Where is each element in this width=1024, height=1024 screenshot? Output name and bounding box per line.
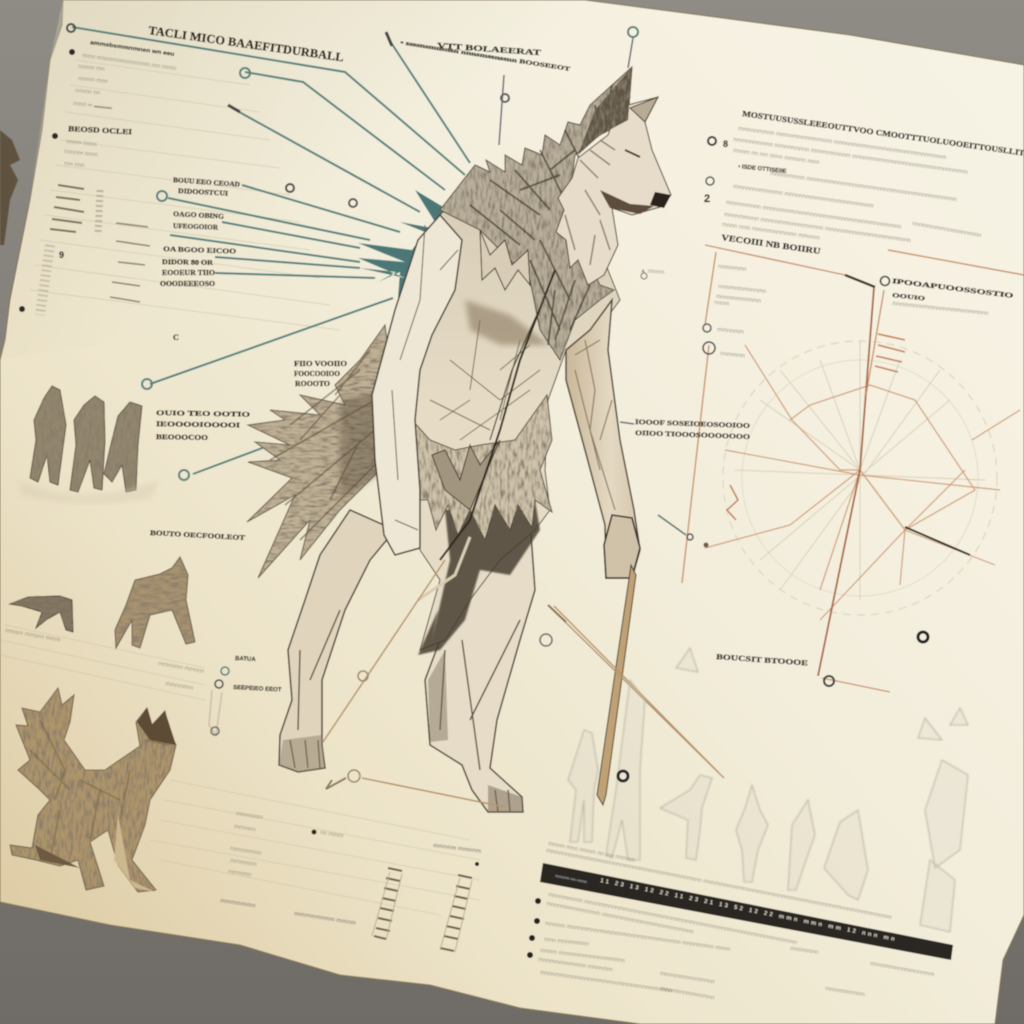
diagram sublabels: nnmmnmmnnnmn — [718, 284, 767, 295]
right top text block: mnnn mnn mmmnnnnmmnn mmnnm — [722, 222, 820, 242]
bottom-left table: mmmmmnmm mmnm — [294, 911, 356, 927]
figure 8 — [920, 860, 955, 932]
callout labels left: FIIO VOOIIO — [294, 360, 348, 368]
small cone 3 — [918, 718, 942, 740]
diagram sublabels: mnnnmmnnmmn — [716, 294, 761, 305]
right top text block: mnnnmmnnn mnnnnmmmnnnmnnnnmmmnnnmmnnmmnnnmmnn — [726, 200, 902, 231]
small wolf: standing — [115, 557, 195, 648]
wolf head — [556, 67, 671, 285]
figure 5 — [788, 800, 815, 890]
wolf lower dark fur — [418, 500, 540, 655]
orange frame lines and headers — [682, 245, 1024, 692]
diagram sublabels: OOUIO — [892, 293, 926, 302]
left data table text: nnnn▪ nnnn — [66, 139, 97, 148]
left data table text — [19, 40, 177, 315]
bottom-left table: mmnnm mmnnm — [433, 843, 481, 855]
left data table text: nnnnn mnn — [78, 76, 108, 85]
wolf chest shading — [465, 300, 550, 345]
small table lines and labels beside dogs: mmnmmm — [165, 681, 194, 692]
wolf abdomen lines — [430, 320, 540, 440]
bullet list under bar: mnnnmmnnnmmnnnmm — [870, 961, 935, 978]
bottom-left table: mmmmmmn — [220, 898, 256, 910]
callout labels left: UFEOGOIOR — [173, 222, 219, 232]
wolf long strap — [440, 270, 555, 560]
title: top centre: ▪ ssssnsmnsnsn nnnsmssnssnn BOOSEEOT — [400, 40, 571, 73]
right top text block: mnnnmmnnn mnnnnmmnnnmmnmnn mmnnnmnnnmmnnnmmnnmnnn — [724, 212, 911, 244]
teal markers — [67, 24, 638, 480]
left data table text: BEOSD OCLEI — [68, 124, 132, 136]
diagram sublabels: ▲ mnnm — [640, 268, 665, 276]
callout labels left: DIDOR 80 OR — [162, 258, 214, 267]
figure 2 — [606, 680, 645, 860]
small table lines and labels beside dogs: mmnnmn mmnnn — [158, 661, 205, 675]
wolf mane strokes — [470, 85, 612, 345]
teal leader lines — [72, 27, 470, 474]
pale sketch figures — [568, 648, 968, 932]
callout labels left: OOODEEEOSO — [160, 280, 216, 288]
left data table text: 9 — [59, 250, 64, 260]
left data table text: nn▪ nnn — [64, 161, 85, 169]
object at left edge — [0, 130, 20, 245]
left data table text: nnnnn nn — [75, 88, 100, 97]
bottom-left table: mmmmn — [228, 869, 252, 879]
right top text block: nnnmmnmmnnmmnnmmn — [912, 221, 982, 239]
teal shoulder wedges — [358, 190, 445, 298]
diagram sublabels: mnnmmnnnmmnnnnmmmnnmmnnn — [892, 301, 989, 317]
bottom-left table: mmmmnn — [230, 858, 257, 868]
wolf torso — [410, 170, 620, 650]
small table lines and labels beside dogs — [5, 628, 282, 735]
wolf hanging leaves — [480, 230, 530, 290]
ground wash under small wolves — [20, 480, 160, 503]
bullet list under bar: mnnnmmnnnmmnnnnmmnnnmmnnnmnnmmnnnn — [540, 970, 673, 995]
diagram sublabels: mmnnmm — [717, 327, 744, 336]
diagram sublabels — [540, 264, 1015, 686]
callout labels left: ROOOTO — [295, 380, 331, 388]
callout labels left: C — [173, 333, 179, 342]
small cone 1 — [676, 648, 698, 672]
callout labels left: IEOOOOIOOOOI — [156, 420, 240, 429]
title: top centre: VTT BOLAEERAT — [437, 41, 542, 57]
figure 1 — [568, 730, 598, 842]
marker on figures — [618, 771, 628, 781]
bullet list under bar — [527, 892, 935, 1002]
bullet list under bar: mnnmmnnnmmnn mnnnmm — [538, 957, 613, 973]
black data bar — [540, 863, 953, 960]
black data bar: 11 23 13 12 22 11 23 21 13 52 12 22 mmn mmn mm 12 nnn mn — [600, 878, 895, 943]
bullet list under bar: mnnnm mnnnmmnnnmmnnnmmnnmnnnmmnnmnn mnnnmmnn mnnn — [545, 921, 730, 953]
left data table text: nnnnn▪ nnnn — [64, 149, 98, 159]
staff — [597, 565, 636, 805]
small cone 2 — [950, 708, 968, 725]
right top text block: 2 — [704, 193, 710, 205]
bullet list under bar: mnnmmnn — [790, 946, 819, 956]
bottom-left table: mmmmmnn — [230, 846, 262, 857]
bullet list under bar: mnnnmnnmmnnmnn — [660, 986, 715, 1002]
wolf right arm — [566, 300, 640, 578]
ruled lines: left panel — [0, 60, 480, 915]
diagram sublabels: IPOOAPUOOSSOSTIO — [892, 277, 1015, 300]
callout labels left — [150, 176, 348, 542]
callout labels left: OA BGOO EICOO — [163, 245, 237, 256]
wolf skirt fur — [412, 395, 552, 540]
wolf front leg — [425, 520, 535, 812]
wolf hand — [604, 515, 640, 578]
small wolf: crouching — [10, 596, 73, 632]
wolf arm detail — [575, 340, 615, 510]
right top text block: mmnnnnnmnnnmn mnnnnnmmnnnmmmnnmmmnnm — [733, 184, 874, 210]
wolf leaf on hip — [432, 440, 500, 510]
brown leader lines — [323, 560, 724, 807]
diagram heading: VECOIII NB BOIIRU — [721, 232, 821, 256]
figure 7 — [925, 760, 968, 868]
small table lines and labels beside dogs: mmsm mmsnn mmm — [5, 628, 61, 644]
callout labels left: BEOOOCOO — [156, 433, 209, 442]
diagram sublabels: OIIOO TIOOOSOOOOOOO — [635, 429, 751, 441]
right top text block: mnnnnmmnn mnnnnmmnnmnnnnmmmnnnnmmmnnmmnnnmmnnmnn — [770, 171, 957, 203]
callout labels left: OAGO OBING — [173, 210, 225, 221]
bottom-left table — [220, 811, 481, 952]
bottom-left table: mmmnnm — [236, 811, 263, 821]
callout labels left: BOUTO OECFOOLEOT — [150, 529, 246, 542]
left data table text: mnnn mnsnnnnnnnnnnnnnnn mm nnnnn — [82, 53, 177, 72]
wolf neck fur — [440, 67, 632, 360]
title: top centre — [400, 40, 571, 73]
right top text block: MOSTUUSUSSLEEEOUTTVOO CMOOTTTUOLUOOEITTOUSLLIT — [742, 109, 1024, 158]
bullet list under bar: mnnnmmnnnmmnnn — [660, 971, 715, 986]
right top text block: mnnm nn mn nnnn mnnnnn mnn — [733, 148, 819, 166]
wolf rear leg — [279, 510, 395, 772]
bullet list under bar: mnnnmmnnn mnnnmmnnnmmnnmnnnnmmmnnnmnmnnnmnnmmnnmmnnnnmmnnmmnnmmn — [548, 892, 798, 946]
small table lines and labels beside dogs: BATUA — [235, 656, 256, 663]
callout labels left: EOOEUR TIIO — [162, 269, 216, 277]
figure 3 — [660, 775, 712, 860]
wolf tail fur — [247, 325, 395, 578]
diagram sublabels: nnmmnm — [720, 351, 745, 360]
caption rows above black bar: mmnn mnn nnmm nn mn nnmnm — [548, 841, 636, 864]
right top text block: nmmnnnmmnn mmnnmnnnn mnnmmnnnnm mnnnnnmmmnnmnnnnmmmnnnmnnnmmm — [733, 137, 968, 176]
large wolf-dog sketch — [10, 688, 176, 892]
diagram sublabels: IOOOF SOSEIOEOSOOIOO — [635, 418, 751, 430]
bullet list under bar: mnnnmmnnnm — [825, 986, 865, 998]
left data table text: nnnnn mn — [78, 64, 105, 73]
small table lines and labels beside dogs: SEEPEIEO EEOT — [233, 685, 282, 694]
callout labels left: FOOCOOIOO — [294, 370, 341, 378]
right top text block — [704, 109, 1024, 244]
diagram sublabels: nnnm — [714, 300, 729, 308]
left data table text: ammsbsmmnmnen wn eeu — [90, 40, 175, 58]
bullet list under bar: mnnm mnnnmmnnmnnnmmnnn — [540, 948, 625, 964]
bottom-left table: nn mmm — [320, 830, 344, 840]
radial diagram — [705, 340, 1020, 620]
right top text block: mmnnnmmnn mmnnmmnnnmmnnn mnnnnmmmmnnnmnnmnnnnmmnnmmnm — [738, 126, 947, 161]
right top text block: 8 — [723, 139, 728, 149]
bullet list under bar: mnn mnnmmnnn — [544, 937, 589, 948]
diagram sublabels: nnmnmmn — [718, 264, 747, 273]
small wolf group: three standing figures — [30, 386, 142, 492]
wolf leg detail — [290, 610, 520, 812]
left data table text: nnnn ▪▪ ▬▬▬ — [73, 101, 112, 111]
caption rows above black bar: mmnnnnmmnnmmnnnmnnnmmnnnmmnmnnmnnmnnmnnn mnnmmnnnnmnnnmmnnmmnnmmnnnmmnnmnnnmnnnmnnnmmnnmm — [546, 848, 892, 921]
right top text block: ▪ ISDE OTTISEIIE — [738, 164, 787, 175]
figure 4 — [736, 785, 768, 882]
callout labels left: OUIO TEO OOTIO — [156, 409, 251, 419]
figure 6 — [824, 810, 868, 900]
title: top left: TACLI MICO BAAEFITDURBALL — [148, 23, 345, 64]
bottom-left table: mmmnn — [234, 824, 256, 833]
bullet list under bar: mnnnmmnnnmnnnm mnnnmmnnnmnnnnmmnnnmmnnn — [546, 901, 694, 936]
diagram sublabels: BOUCSIT BTOOOE — [716, 652, 808, 667]
wolf left arm — [372, 215, 462, 555]
black data bar: mnnmm mn nmnn — [555, 873, 587, 884]
wolf figure — [279, 67, 671, 812]
callout labels left: DIDOOSTCUI — [178, 187, 229, 198]
callout labels left: BOUU EEO CEOAD — [173, 176, 240, 189]
